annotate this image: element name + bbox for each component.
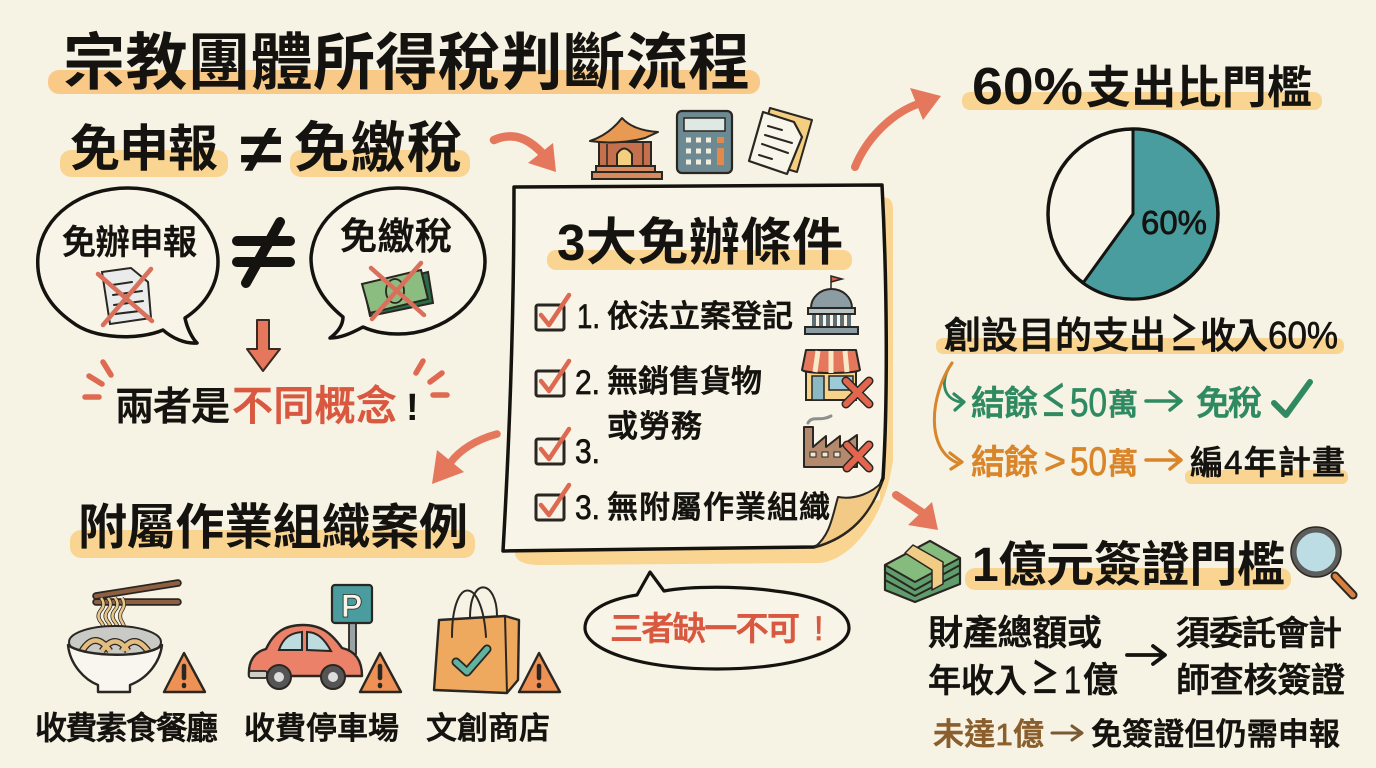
speech bubble: no tax payable: [311, 188, 485, 338]
note page curl: [815, 482, 882, 547]
heading: affiliated organisation cases: 附屬作業組織案例: [78, 501, 468, 555]
arrow: up to 60% threshold: [855, 88, 941, 167]
heading: 60% expenditure ratio: [962, 58, 1322, 116]
arrow: to affiliated organisation cases: [432, 434, 497, 484]
conclusion text with sparks: 不同概念: [232, 383, 397, 429]
panel: 3 exemption conditions note: [503, 185, 893, 565]
icon: calculator: [677, 111, 732, 173]
branch: balance at most 500k is tax exempt: 萬: [1108, 389, 1138, 422]
branch: balance at most 500k is tax exempt: ≤: [1041, 368, 1066, 429]
title: 宗教團體所得稅判斷流程: [63, 29, 750, 98]
note paper: [503, 185, 886, 551]
icon: factory with cross: [804, 416, 869, 468]
arrow: assets to audit: [1127, 646, 1165, 664]
subheading: filing exemption is not tax exemption: ≠: [240, 111, 282, 187]
icon: crossed out banknotes: [362, 263, 433, 319]
condition 3 no affiliated organisation: [536, 485, 830, 527]
branch: balance at most 500k is tax exempt: 結餘: [971, 385, 1038, 423]
speech bubble: no tax payable: 免繳稅: [340, 216, 452, 257]
branch: balance at most 500k is tax exempt: 免稅: [1196, 385, 1262, 423]
branch: balance at most 500k is tax exempt: 50: [1070, 381, 1107, 425]
text: total assets or annual income: ≥: [1031, 645, 1059, 706]
subheading: filing exemption is not tax exemption: [60, 111, 470, 187]
icon: government building: [805, 276, 858, 334]
condition 3 no affiliated organisation: 無附屬作業組織: [607, 490, 830, 525]
rule: expenditure at least 60% of income: 60%: [1268, 315, 1338, 357]
callout: all three required: 三者缺一不可: [610, 610, 800, 647]
note: below 100 million: 未達1億: [933, 717, 1044, 752]
pie chart: 60%: 60%: [1141, 204, 1207, 241]
condition 2: 或勞務: [607, 409, 702, 444]
branch: balance over 500k needs 4 year plan: 編4年計畫: [1190, 444, 1345, 481]
icon: warning triangle: [360, 653, 401, 692]
text: CPA audit required: [1176, 615, 1345, 700]
icon: red car: [249, 625, 362, 689]
condition 1: 1.: [577, 298, 600, 336]
conclusion text with sparks: !: [406, 387, 419, 429]
branch: balance over 500k needs 4 year plan: 萬: [1108, 448, 1138, 481]
example: vegetarian restaurant: [35, 583, 218, 746]
big not-equal sign: [237, 222, 290, 283]
example: vegetarian restaurant: 收費素食餐廳: [35, 710, 218, 746]
example: paid parking lot: 收費停車場: [244, 711, 399, 746]
branch: balance at most 500k is tax exempt: [971, 368, 1310, 429]
text: total assets or annual income: 1: [1064, 660, 1081, 702]
note: below 100 million: 免簽證但仍需申報: [1091, 717, 1340, 752]
condition 3 blank: 3.: [575, 433, 600, 471]
heading: 60% expenditure ratio: 支出比門檻: [1086, 62, 1312, 113]
callout: all three required: !: [814, 610, 823, 648]
icon: warning triangle: [519, 653, 560, 692]
icon: temple: [590, 118, 662, 179]
condition 1: [536, 295, 793, 336]
example: paid parking lot: [244, 585, 401, 746]
rule: expenditure at least 60% of income: [936, 298, 1344, 364]
speech bubble: no filing needed: [38, 188, 218, 343]
conclusion text with sparks: [85, 361, 447, 429]
text: CPA audit required: 須委託會計: [1176, 615, 1342, 653]
heading: 100 million audit threshold: 1億元簽證門檻: [972, 539, 1285, 592]
conclusion text with sparks: 兩者是: [115, 386, 230, 429]
condition 2: 無銷售貨物: [607, 364, 762, 399]
branch: balance over 500k needs 4 year plan: 50: [1070, 440, 1107, 484]
condition 3 no affiliated organisation: 3.: [575, 489, 600, 527]
icon: warning triangle: [164, 653, 205, 692]
branch arrow: balance at most 500k: [944, 363, 964, 410]
note heading: 3大免辦條件: [557, 214, 843, 271]
rule: expenditure at least 60% of income: 創設目的支出: [944, 315, 1166, 356]
arrow: to 100 million threshold: [896, 495, 938, 530]
heading: 60% expenditure ratio: 60%: [972, 58, 1083, 116]
text: total assets or annual income: 財產總額或: [928, 614, 1102, 653]
icon: documents: [749, 108, 812, 174]
branch: balance over 500k needs 4 year plan: >: [1044, 441, 1066, 483]
speech bubble: no filing needed: 免辦申報: [62, 224, 197, 262]
rule: expenditure at least 60% of income: 收入: [1200, 315, 1268, 356]
rule: expenditure at least 60% of income: ≥: [1170, 298, 1198, 364]
icon: green check: [1274, 382, 1310, 415]
icon: parking sign: P: [341, 588, 362, 624]
subheading: filing exemption is not tax exemption: 免繳稅: [294, 117, 462, 179]
text: total assets or annual income: 億: [1083, 661, 1118, 700]
note: below 100 million: [933, 717, 1340, 752]
pie chart: 60%: [1048, 129, 1218, 299]
icon: noodle bowl: [68, 583, 178, 692]
icon: crossed out document: [98, 268, 152, 325]
arrow: down to conclusion: [247, 320, 280, 371]
arrow to conditions note: [494, 136, 556, 172]
example: cultural gift shop: 文創商店: [426, 711, 550, 746]
icon: money stack: [885, 541, 960, 602]
callout: all three required: [585, 572, 849, 669]
branch arrow: balance over 500k: [934, 363, 962, 469]
text: CPA audit required: 師查核簽證: [1176, 662, 1345, 700]
condition 2: [536, 361, 762, 444]
text: total assets or annual income: 年收入: [928, 662, 1027, 699]
condition 2: 2.: [575, 364, 600, 402]
example: cultural gift shop: [426, 587, 560, 746]
note shadow: [515, 197, 893, 565]
condition 3 blank: [536, 429, 600, 471]
text: total assets or annual income: [928, 614, 1118, 706]
branch: balance over 500k needs 4 year plan: [971, 440, 1348, 484]
icon: magnifying glass: [1291, 527, 1353, 595]
icon: parking sign: [332, 585, 372, 654]
subheading: filing exemption is not tax exemption: 免申報: [70, 121, 218, 177]
condition 1: 依法立案登記: [607, 299, 793, 334]
icon: shop with cross: [802, 350, 869, 404]
branch: balance over 500k needs 4 year plan: 結餘: [971, 444, 1038, 482]
icon: shopping bag: [434, 587, 519, 693]
